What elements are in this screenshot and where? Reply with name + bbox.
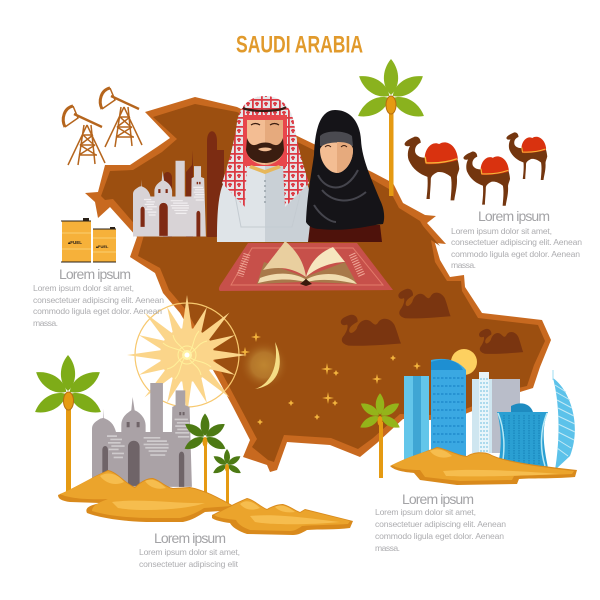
text block: desert bbox=[139, 530, 240, 569]
text block: camels: commodo ligula eget dolor. Aenean bbox=[451, 249, 580, 259]
sun bbox=[127, 295, 247, 415]
fuel barrels bbox=[61, 218, 116, 262]
city skyline bbox=[404, 349, 575, 470]
text block: city: commodo ligula eget dolor. Aenean bbox=[375, 531, 504, 541]
text block: city bbox=[375, 491, 506, 553]
text block: city: Lorem ipsum dolor sit amet, bbox=[375, 507, 476, 517]
medium palm tree bbox=[182, 413, 228, 494]
text block: fuel: Lorem ipsum bbox=[59, 266, 131, 282]
woman in black hijab bbox=[306, 110, 384, 242]
text block: camels: consectetuer adipiscing elit. Aenean bbox=[451, 237, 582, 247]
oil pumps bbox=[63, 88, 142, 165]
text block: camels: Lorem ipsum dolor sit amet, bbox=[451, 226, 552, 236]
text block: fuel: massa. bbox=[33, 318, 58, 328]
man in keffiyeh bbox=[217, 96, 313, 242]
text block: desert: Lorem ipsum bbox=[154, 530, 226, 546]
text block: city: consectetuer adipiscing elit. Aenean bbox=[375, 519, 506, 529]
white mosque bbox=[133, 161, 206, 237]
fuel barrels: ▴FUEL bbox=[67, 240, 82, 245]
open book bbox=[257, 241, 357, 286]
text block: city: massa. bbox=[375, 543, 400, 553]
dark red towers behind mosque bbox=[163, 131, 224, 237]
text block: city: Lorem ipsum bbox=[402, 491, 474, 507]
moon and glow bbox=[239, 340, 289, 390]
desert dune left bbox=[58, 470, 237, 522]
walking camels caravan bbox=[405, 132, 547, 206]
text block: fuel: commodo ligula eget dolor. Aenean bbox=[33, 306, 162, 316]
text block: camels bbox=[451, 208, 582, 270]
left palm tree bbox=[32, 355, 104, 492]
desert dune city bbox=[390, 447, 577, 485]
prayer carpet bbox=[219, 243, 393, 291]
fuel barrels: ▴FUEL bbox=[95, 244, 109, 249]
text block: camels: Lorem ipsum bbox=[478, 208, 550, 224]
text block: fuel bbox=[33, 266, 164, 328]
text block: fuel: Lorem ipsum dolor sit amet, bbox=[33, 283, 134, 293]
grey mosque bbox=[92, 383, 192, 487]
text block: camels: massa. bbox=[451, 260, 476, 270]
palm tree by city bbox=[358, 393, 402, 478]
stars bbox=[240, 332, 421, 425]
map silhouettes: camels bbox=[341, 289, 523, 354]
title: SAUDI ARABIA bbox=[236, 32, 363, 58]
text block: fuel: consectetuer adipiscing elit. Aenean bbox=[33, 295, 164, 305]
text block: desert: consectetuer adipiscing elit bbox=[139, 559, 239, 569]
text block: desert: Lorem ipsum dolor sit amet, bbox=[139, 547, 240, 557]
palm tree on map top bbox=[355, 59, 427, 196]
desert dune right bbox=[212, 498, 353, 535]
map of Saudi Arabia bbox=[85, 97, 551, 472]
small palm tree bbox=[212, 449, 242, 511]
